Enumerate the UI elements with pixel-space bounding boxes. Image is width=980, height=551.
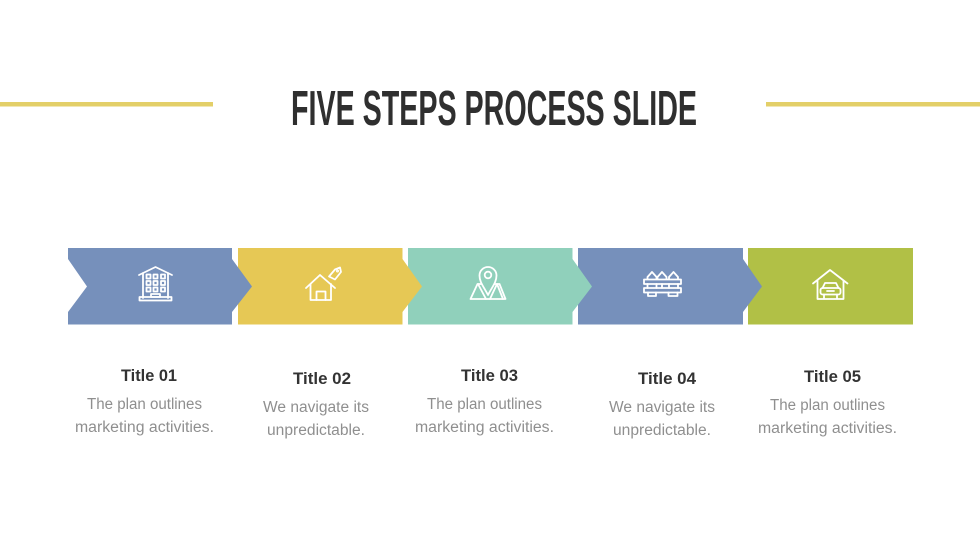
left title rule: [0, 102, 213, 106]
step 4 text: [609, 370, 715, 439]
step 2 description: [263, 399, 369, 439]
step 4 title: Title 04: [638, 370, 697, 388]
icon: garage with car: [813, 270, 848, 299]
step 3 text: [415, 367, 554, 436]
step 5 banner: [748, 248, 913, 324]
step 4 description: We navigate its: [609, 399, 715, 416]
step 1 description: marketing activities.: [75, 419, 214, 436]
step 5 description: marketing activities.: [758, 420, 897, 437]
icon: office building: [139, 267, 172, 300]
step 1 description: The plan outlines: [87, 396, 202, 413]
step 5 description: The plan outlines: [770, 397, 885, 414]
step 4 description: unpredictable.: [613, 422, 711, 439]
step 2 title: Title 02: [293, 370, 351, 388]
step 5 description: [758, 397, 897, 437]
icon: house with tag: [306, 268, 341, 300]
step 4 arrow: [578, 248, 762, 324]
step 1 arrow: [68, 248, 252, 324]
step 2 text: [263, 370, 369, 439]
step 1 description: [75, 396, 214, 436]
step 3 description: [415, 396, 554, 436]
step 3 description: marketing activities.: [415, 419, 554, 436]
step 2 description: unpredictable.: [267, 422, 365, 439]
right title rule: [766, 102, 980, 106]
title: FIVE STEPS PROCESS SLIDE: [291, 82, 697, 136]
step 1 title: Title 01: [121, 367, 177, 385]
step 5 text: [758, 368, 897, 437]
step 2 arrow: [238, 248, 422, 324]
step 3 title: Title 03: [461, 367, 518, 385]
icon: map pin: [470, 267, 506, 299]
step 1 text: [75, 367, 214, 436]
step 2 description: We navigate its: [263, 399, 369, 416]
step 5 title: Title 05: [804, 368, 861, 386]
step 3 description: The plan outlines: [427, 396, 542, 413]
icon: fence: [644, 272, 681, 296]
step 4 description: [609, 399, 715, 439]
step 3 arrow: [408, 248, 592, 324]
